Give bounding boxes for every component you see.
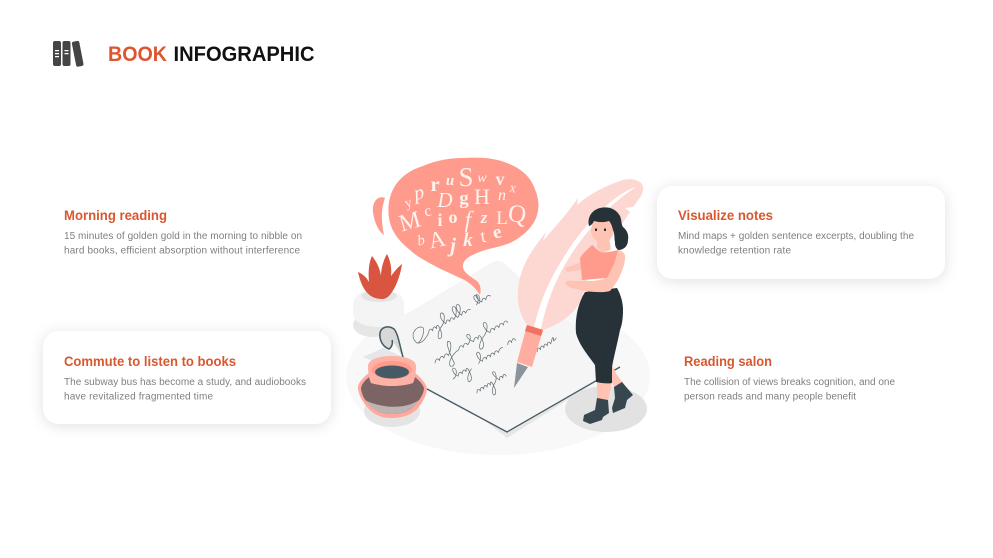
bubble shape bbox=[388, 158, 538, 295]
letters: t bbox=[479, 226, 487, 246]
letters: u bbox=[446, 173, 454, 189]
face details bbox=[595, 228, 606, 231]
card background bbox=[657, 186, 945, 279]
front calf bbox=[597, 380, 612, 401]
illustration: writing with a feather quill bbox=[346, 158, 650, 455]
text: commute description: have revitalized fragmented time bbox=[64, 392, 213, 402]
front boot bbox=[583, 398, 609, 424]
top bbox=[580, 245, 618, 280]
text: morning reading description bbox=[64, 231, 302, 256]
letters: g bbox=[459, 188, 469, 209]
text: reading salon description: person reads and many people benefit bbox=[684, 392, 856, 402]
letters: Q bbox=[506, 200, 528, 229]
letters: i bbox=[437, 210, 443, 230]
letters: v bbox=[496, 169, 504, 189]
letters: f bbox=[465, 207, 475, 232]
text: commute description bbox=[64, 377, 306, 402]
letters: n bbox=[498, 187, 506, 204]
ink pot bbox=[358, 356, 427, 427]
card background bbox=[43, 331, 331, 424]
letters: A bbox=[426, 225, 448, 253]
text: visualize notes description bbox=[678, 231, 914, 256]
title: INFOGRAPHIC bbox=[174, 43, 314, 66]
letters bbox=[396, 162, 528, 257]
letters: M bbox=[396, 207, 424, 237]
letters: o bbox=[448, 207, 458, 227]
letters: x bbox=[508, 179, 518, 196]
text: commute description: The subway bus has become a study, and audiobooks bbox=[64, 377, 306, 388]
back boot bbox=[612, 382, 633, 413]
pants bbox=[576, 288, 623, 383]
letters: w bbox=[477, 171, 487, 186]
speech bubble with letters bbox=[373, 158, 538, 295]
small bubble bbox=[373, 197, 385, 235]
heading: morning reading: Morning reading bbox=[64, 208, 167, 223]
text: reading salon description bbox=[684, 377, 895, 402]
text: morning reading description: hard books, efficient absorption without interference bbox=[64, 246, 300, 256]
letters: S bbox=[458, 162, 474, 192]
heading: reading salon: Reading salon bbox=[684, 354, 772, 369]
title: BOOK bbox=[108, 43, 167, 66]
panel: commute to listen to books bbox=[43, 331, 331, 424]
letters: D bbox=[436, 188, 453, 212]
letters: H bbox=[474, 184, 490, 209]
plant pot bbox=[353, 254, 404, 337]
back leg bbox=[609, 365, 623, 389]
text: visualize notes description: knowledge retention rate bbox=[678, 246, 791, 256]
paper bbox=[363, 261, 620, 438]
panel: morning reading bbox=[64, 208, 302, 256]
handwriting bbox=[409, 289, 565, 402]
letters: e bbox=[490, 221, 504, 244]
letters: p bbox=[410, 181, 426, 205]
letters: L bbox=[496, 208, 508, 229]
pen nib bbox=[514, 363, 528, 388]
letters: j bbox=[447, 233, 456, 257]
woman bbox=[565, 207, 633, 424]
panel: visualize notes bbox=[657, 186, 945, 279]
letters: r bbox=[430, 172, 440, 196]
arm and hand bbox=[565, 250, 625, 292]
letters: z bbox=[480, 208, 488, 227]
neck bbox=[597, 238, 611, 252]
text: visualize notes description: Mind maps + golden sentence excerpts, doubling the bbox=[678, 231, 914, 242]
heading: commute: Commute to listen to books bbox=[64, 354, 236, 369]
panel: reading salon bbox=[684, 354, 895, 402]
text: morning reading description: 15 minutes of golden gold in the morning to nibble on bbox=[64, 231, 302, 242]
feather quill bbox=[514, 179, 643, 388]
icon: books bbox=[53, 41, 84, 67]
letters: b bbox=[416, 232, 427, 250]
letters: c bbox=[422, 202, 433, 221]
heading: visualize notes: Visualize notes bbox=[678, 208, 773, 223]
pen grip bbox=[517, 325, 543, 367]
title bbox=[108, 43, 314, 66]
far arm bbox=[565, 262, 582, 272]
boot shadow bbox=[565, 386, 647, 432]
letters: y bbox=[403, 195, 414, 212]
letters: k bbox=[463, 230, 473, 251]
hair bbox=[589, 207, 628, 250]
ground ellipse bbox=[346, 297, 650, 455]
feather vane bbox=[518, 179, 643, 331]
feather spine bbox=[534, 187, 636, 329]
head bbox=[591, 218, 613, 242]
text: reading salon description: The collision of views breaks cognition, and one bbox=[684, 377, 895, 388]
